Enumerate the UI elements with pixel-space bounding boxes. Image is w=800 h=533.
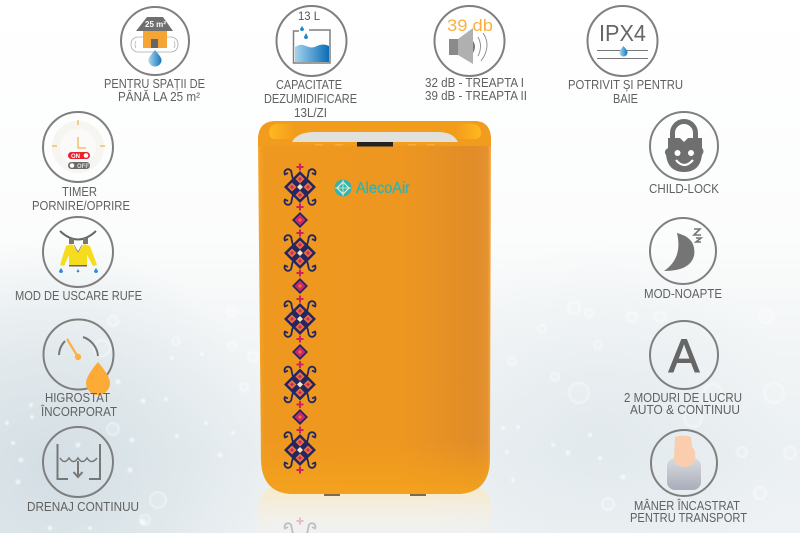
product: dehumidifier — [258, 121, 492, 533]
label: DEZUMIDIFICARE — [264, 92, 357, 106]
feature: noise — [425, 6, 527, 103]
label: 39 dB - TREAPTA II — [425, 89, 527, 103]
feature: capacity — [264, 6, 357, 120]
label: TIMER — [62, 185, 97, 199]
label: MÂNER ÎNCASTRAT — [634, 498, 740, 513]
label: PENTRU TRANSPORT — [630, 511, 747, 525]
icon: timer: ON — [71, 154, 80, 160]
icon: sweater — [59, 231, 98, 273]
icon: timer: OFF — [77, 164, 89, 170]
filter insert — [292, 132, 458, 142]
label: DRENAJ CONTINUU — [27, 500, 139, 514]
feature: handle — [630, 430, 747, 525]
icon: water tank: 13 L — [298, 9, 320, 23]
label — [104, 77, 205, 104]
body — [258, 121, 491, 494]
label — [630, 498, 747, 525]
icon: drain tank — [58, 444, 100, 479]
label — [568, 78, 683, 106]
logo: AlecoAir — [334, 180, 410, 197]
product reflection — [258, 484, 492, 533]
feature: night mode — [644, 218, 722, 301]
top recess — [269, 124, 481, 139]
label: MOD DE USCARE RUFE — [15, 289, 142, 303]
folk pattern — [284, 164, 316, 474]
icon: house: 25 m² — [145, 20, 166, 29]
label — [425, 76, 527, 103]
icon: timer — [52, 120, 105, 173]
feature: timer — [32, 112, 130, 213]
label — [624, 391, 742, 417]
label: CAPACITATE — [276, 78, 342, 92]
icon: gauge and drop — [59, 337, 110, 395]
feature: IPX4 — [568, 6, 683, 106]
feature: drain — [27, 427, 139, 514]
icon: moon — [664, 229, 701, 271]
control lights — [315, 144, 435, 146]
top rim — [258, 121, 491, 146]
label: MOD-NOAPTE — [644, 287, 722, 301]
control panel — [357, 142, 393, 146]
label: PORNIRE/OPRIRE — [32, 199, 130, 213]
label: PÂNĂ LA 25 m² — [118, 89, 200, 104]
feature: child lock — [649, 112, 720, 196]
feature: hygrostat — [40, 320, 117, 419]
label: 2 MODURI DE LUCRU — [624, 391, 742, 405]
label: ÎNCORPORAT — [40, 404, 117, 419]
label: PENTRU SPAȚII DE — [104, 77, 205, 91]
feature: work modes — [624, 321, 742, 417]
label — [264, 78, 357, 120]
reflected pattern — [285, 518, 315, 533]
feature: laundry — [15, 217, 142, 303]
label: AUTO & CONTINUU — [630, 403, 740, 417]
label: BAIE — [613, 92, 638, 106]
feet — [324, 493, 426, 496]
label: CHILD-LOCK — [649, 182, 720, 196]
label — [32, 185, 130, 213]
icon: hand on grip — [667, 436, 701, 490]
label: HIGROSTAT — [45, 391, 110, 405]
label — [40, 391, 117, 419]
label: 32 dB - TREAPTA I — [425, 76, 524, 90]
icon: IPX4: IPX4 — [599, 20, 646, 46]
feature: room size — [104, 7, 205, 104]
label: 13L/ZI — [294, 106, 327, 120]
label: POTRIVIT ȘI PENTRU — [568, 78, 683, 92]
icon: lock face — [665, 122, 704, 172]
logo: AlecoAir: AlecoAir — [356, 180, 410, 197]
icon: speaker: 39 db — [447, 16, 493, 35]
bottom highlight — [260, 440, 490, 494]
icon: letter A: A — [668, 329, 700, 382]
